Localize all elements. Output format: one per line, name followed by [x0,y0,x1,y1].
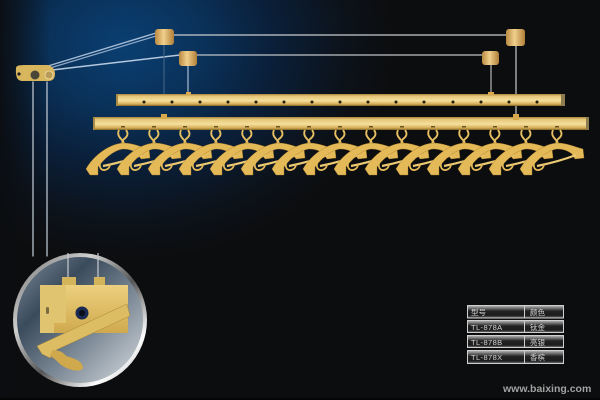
model table: TL-878A [471,323,503,332]
detail lens: hand crank winder [13,253,147,387]
front rail [93,114,589,130]
ceiling pulleys [155,29,525,66]
rear rail [116,92,565,106]
model table: 亮银 [530,337,545,347]
model table: 钛金 [530,322,545,332]
model table: TL-878B [471,338,503,347]
model table: 香槟 [530,352,545,362]
model table: 颜色 [530,307,545,317]
winder body [40,277,128,333]
cables [33,33,516,256]
model table: TL-878X [471,353,503,362]
wall pulley unit [16,65,55,81]
hangers [86,126,584,175]
crank handle [37,304,130,371]
model table [468,305,564,364]
model table: 型号 [471,308,486,317]
watermark url: www.baixing.com [502,383,591,395]
